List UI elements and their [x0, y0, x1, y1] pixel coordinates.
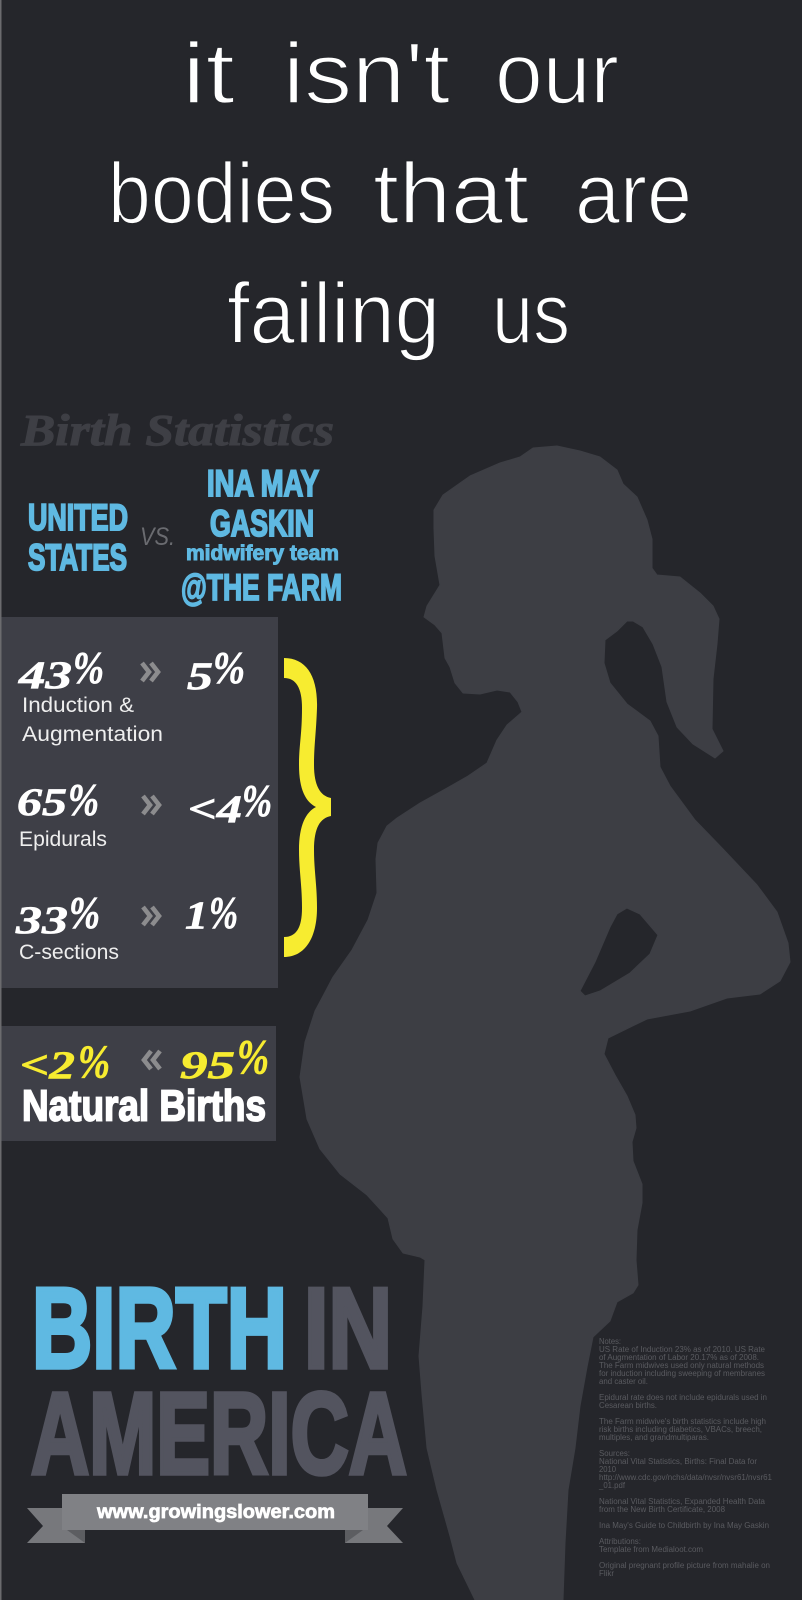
- title: failing: [227, 266, 440, 362]
- label: united states: STATES: [28, 536, 127, 578]
- comparison header: [28, 463, 342, 608]
- heading: birth in america: AMERICA: [31, 1368, 407, 1498]
- panel: natural births: %: [78, 1036, 110, 1088]
- notes and sources text block: Sources:: [599, 1449, 630, 1458]
- notes and sources text block: Flikr: [599, 1569, 614, 1578]
- title: bodies: [108, 146, 335, 242]
- heading: birth in america: [31, 1266, 407, 1498]
- label: ina may gaskin midwifery team at the farm: midwifery team: [186, 542, 339, 565]
- notes and sources text block: Original pregnant profile picture from mahalie on: [599, 1561, 770, 1570]
- notes and sources text block: from the New Birth Certificate, 2008: [599, 1505, 726, 1514]
- notes and sources text block: Notes:: [599, 1337, 621, 1346]
- stat row: epidurals: %: [242, 775, 272, 826]
- notes and sources text block: Epidural rate does not include epidurals used in: [599, 1393, 767, 1402]
- notes and sources text block: _01.pdf: [598, 1481, 626, 1490]
- stat row: induction and augmentation: %: [73, 642, 104, 693]
- stat row: induction and augmentation: %: [213, 642, 245, 693]
- label: ina may gaskin midwifery team at the farm: INA MAY: [207, 463, 319, 504]
- stat row: c-sections: C-sections: [19, 941, 119, 964]
- notes and sources text block: for induction including sweeping of membranes: [599, 1369, 765, 1378]
- panel: natural births: <2: [20, 1044, 75, 1087]
- stat row: epidurals: %: [68, 774, 99, 825]
- stat row: epidurals: [17, 774, 272, 851]
- stat row: epidurals: Epidurals: [19, 828, 107, 851]
- title: that: [373, 146, 529, 242]
- stat row: c-sections: [15, 887, 238, 964]
- notes and sources text block: multiples, and grandmultiparas.: [599, 1433, 709, 1442]
- title: are: [575, 146, 692, 242]
- notes and sources text block: [598, 1337, 773, 1578]
- stat row: induction and augmentation: Augmentation: [22, 723, 163, 746]
- title: isn't: [283, 26, 450, 122]
- heading: birth in america: IN: [304, 1266, 392, 1392]
- heading: birth statistics: Birth Statistics: [20, 406, 334, 455]
- panel: statistics comparison: [2, 617, 278, 988]
- stat row: c-sections: %: [69, 887, 100, 938]
- label: ina may gaskin midwifery team at the farm: [181, 463, 342, 608]
- notes and sources text block: of Augmentation of Labor 20.17% as of 2008.: [599, 1353, 759, 1362]
- title: us: [492, 266, 570, 362]
- panel: natural births: 95: [180, 1044, 235, 1087]
- panel: natural births: Natural Births: [22, 1082, 266, 1130]
- notes and sources text block: US Rate of Induction 23% as of 2010. US Rate: [599, 1345, 766, 1354]
- title: our: [495, 26, 619, 122]
- notes and sources text block: 2010: [599, 1465, 617, 1474]
- stat row: epidurals: 65: [17, 781, 67, 824]
- stat row: epidurals: <4: [188, 788, 242, 831]
- panel: natural births: [2, 1026, 276, 1141]
- ribbon banner with url: www.growingslower.com: [96, 1502, 335, 1523]
- notes and sources text block: Cesarean births.: [599, 1401, 657, 1410]
- stat row: induction and augmentation: 5: [187, 655, 213, 698]
- title: [108, 26, 692, 362]
- pregnant woman silhouette: [300, 446, 790, 1600]
- notes and sources text block: Template from Medialoot.com: [599, 1545, 703, 1554]
- stat row: induction and augmentation: [18, 642, 245, 746]
- label: united states: UNITED: [28, 496, 128, 538]
- label: ina may gaskin midwifery team at the farm: @THE FARM: [181, 566, 342, 608]
- notes and sources text block: The Farm midwive's birth statistics include high: [599, 1417, 766, 1426]
- stat row: c-sections: 33: [15, 899, 68, 942]
- label: ina may gaskin midwifery team at the farm: GASKIN: [210, 502, 314, 544]
- heading: birth in america: BIRTH: [32, 1266, 287, 1392]
- stat row: induction and augmentation: Induction &: [22, 694, 134, 717]
- notes and sources text block: Attributions:: [599, 1537, 641, 1546]
- notes and sources text block: Ina May's Guide to Childbirth by Ina May Gaskin: [599, 1521, 769, 1530]
- panel: natural births: %: [237, 1029, 269, 1084]
- notes and sources text block: National Vital Statistics, Expanded Health Data: [599, 1497, 766, 1506]
- notes and sources text block: The Farm midwives used only natural methods: [599, 1361, 764, 1370]
- title: it: [182, 26, 235, 122]
- label: united states: [28, 496, 128, 578]
- stat row: c-sections: %: [209, 887, 238, 938]
- notes and sources text block: http://www.cdc.gov/nchs/data/nvsr/nvsr61/nvsr61: [599, 1473, 773, 1482]
- icon: yellow curly brace: [284, 658, 331, 957]
- notes and sources text block: and caster oil.: [599, 1377, 648, 1386]
- notes and sources text block: National Vital Statistics, Births: Final Data for: [599, 1457, 757, 1466]
- label: vs: VS.: [140, 523, 175, 551]
- stat row: c-sections: 1: [185, 894, 208, 937]
- notes and sources text block: risk births including diabetics, VBACs, breech,: [599, 1425, 762, 1434]
- stat row: induction and augmentation: 43: [18, 654, 72, 697]
- ribbon banner with url: [27, 1494, 403, 1543]
